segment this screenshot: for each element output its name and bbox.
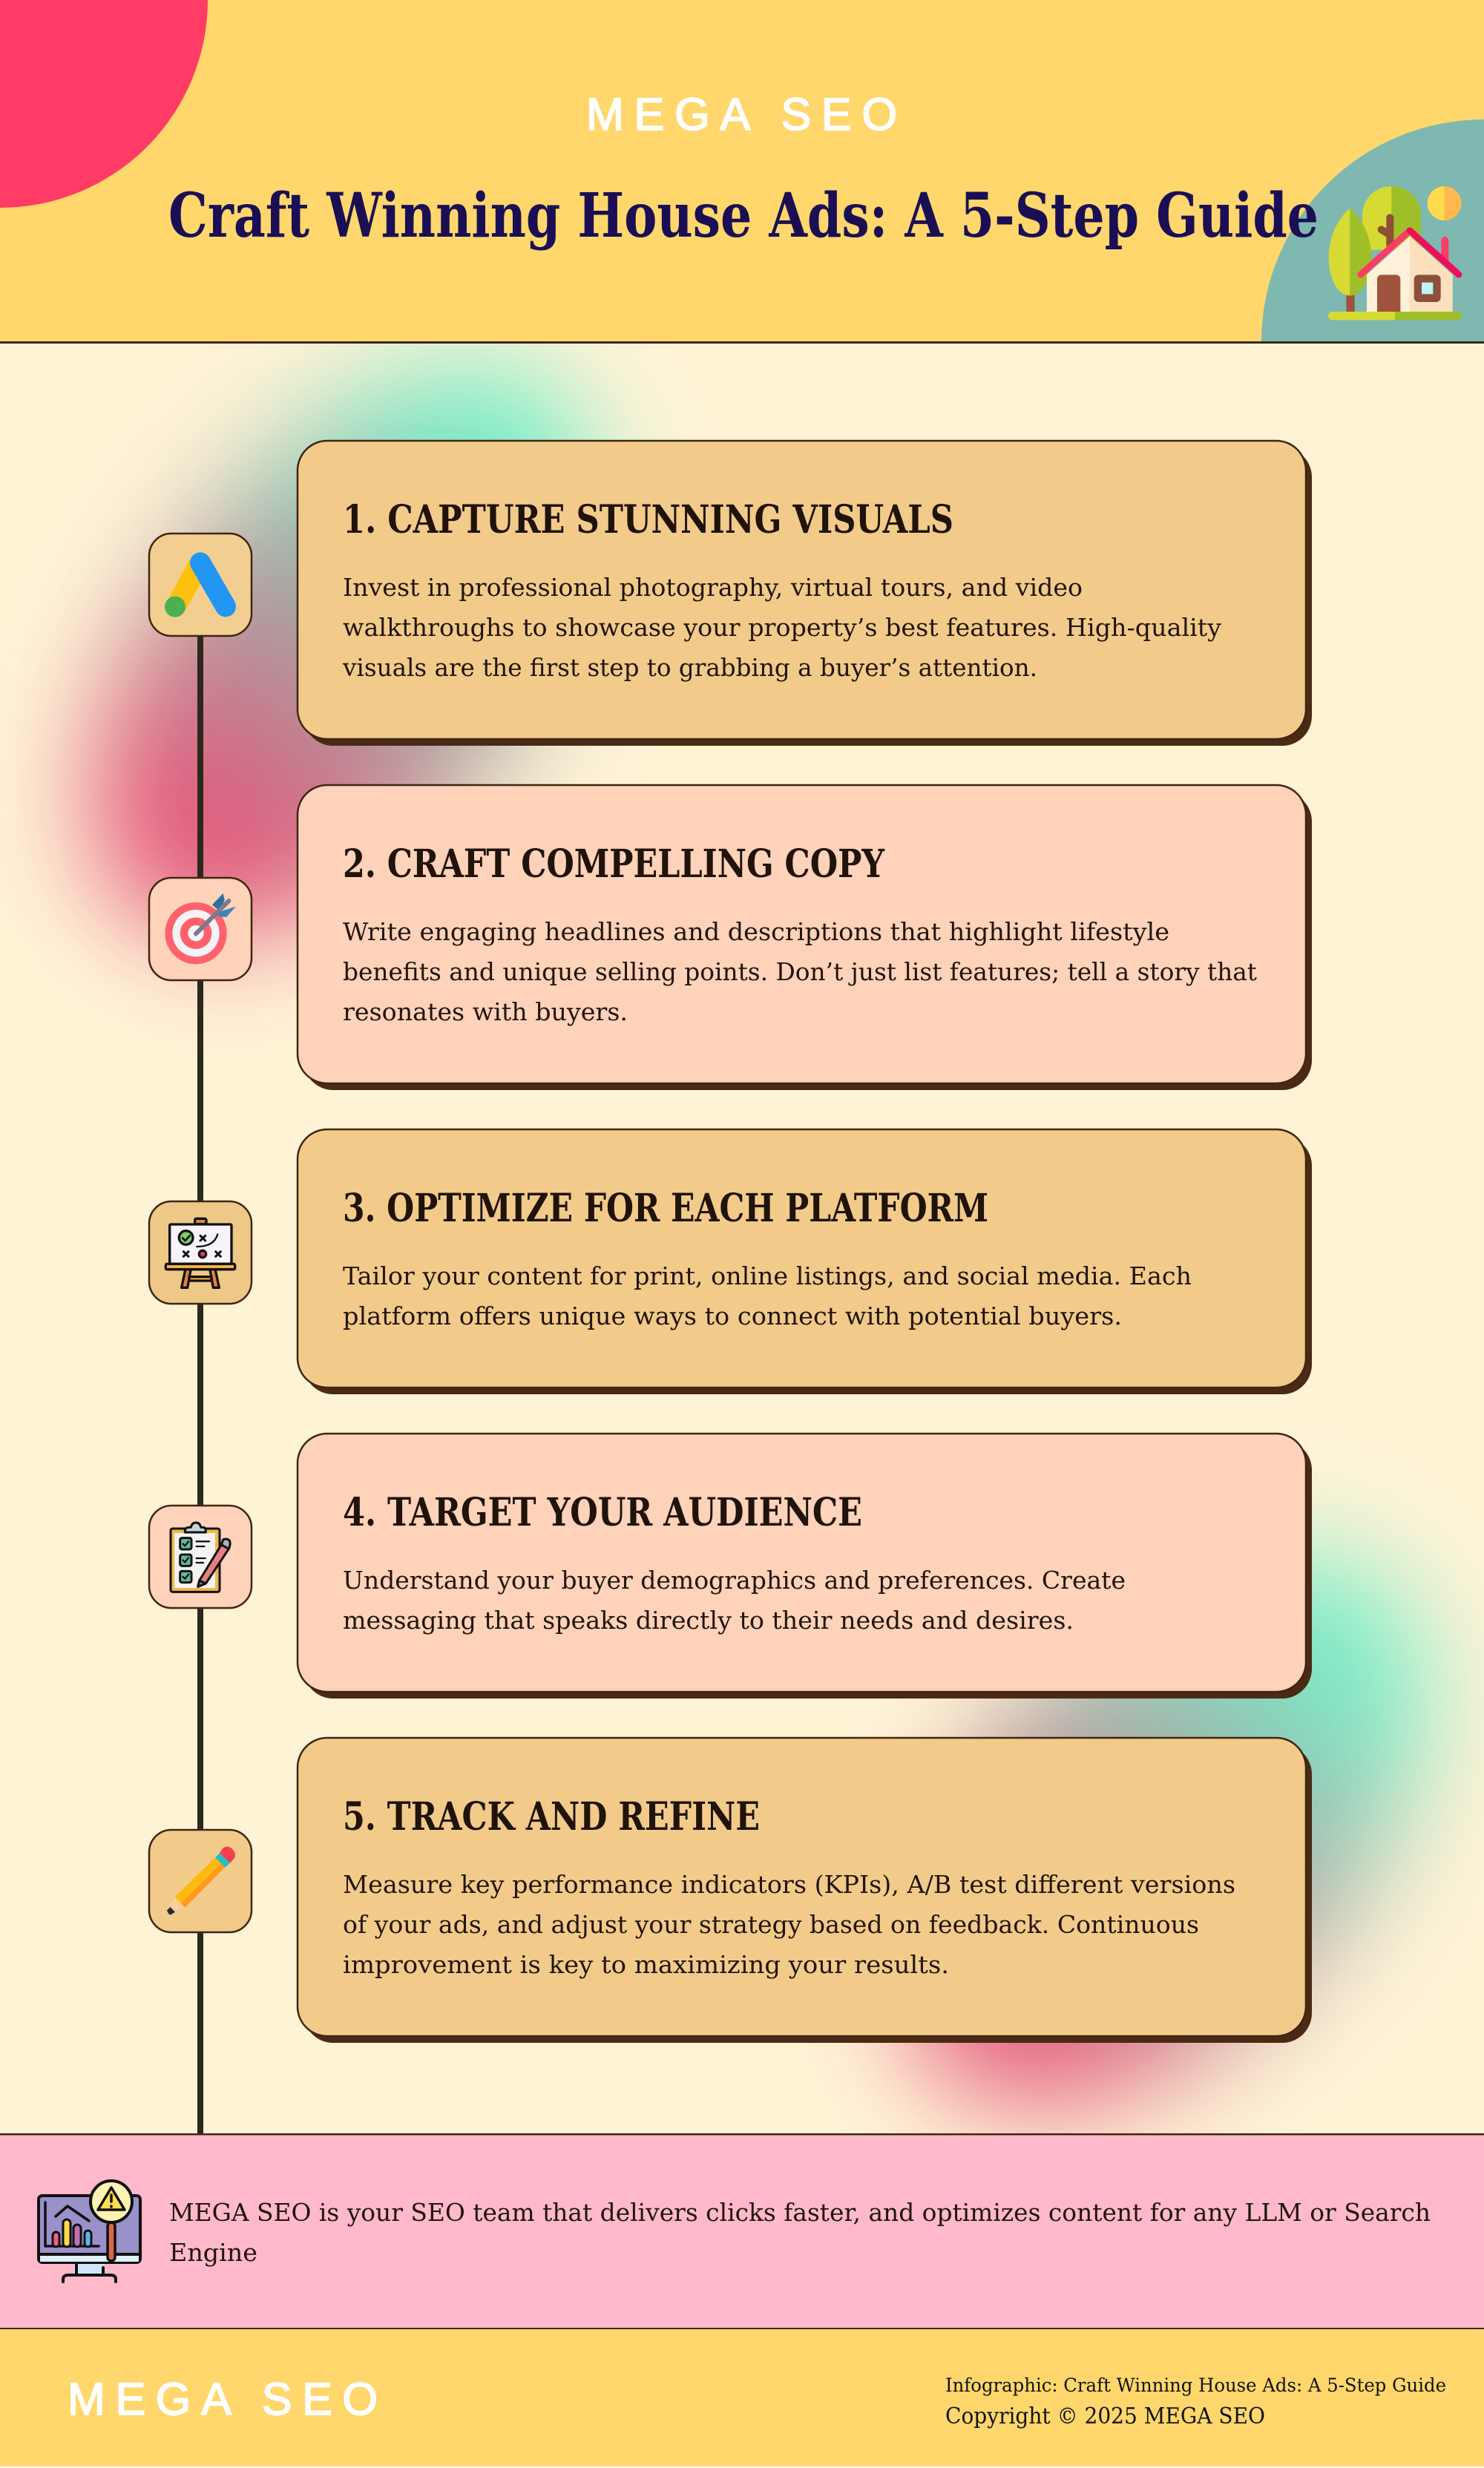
footer panel (0, 2329, 1484, 2467)
step 5 body: Measure key performance indicators (KPIs), A/B test different versions (343, 1870, 1235, 1899)
step 2 heading: 2. CRAFT COMPELLING COPY (343, 841, 885, 887)
icon: house with trees and sun (1328, 186, 1462, 320)
step 3 body: Tailor your content for print, online listings, and social media. Each (343, 1261, 1192, 1290)
step 3 card (298, 1129, 1312, 1394)
step 2 body: benefits and unique selling points. Don’t just list features; tell a story that (343, 957, 1257, 986)
footer copyright: Copyright © 2025 MEGA SEO (945, 2403, 1265, 2429)
band text (169, 2198, 1431, 2267)
footer logo text: MEGA SEO (68, 2374, 378, 2424)
step 3 heading: 3. OPTIMIZE FOR EACH PLATFORM (343, 1186, 988, 1231)
main cream background (0, 343, 1484, 2134)
step 2 body: Write engaging headlines and descriptions that highlight lifestyle (343, 917, 1169, 946)
decorative teal quarter circle (1261, 119, 1484, 342)
icon: target with arrow badge (149, 878, 252, 980)
timeline line (197, 636, 203, 2133)
step 1 body: visuals are the first step to grabbing a buyer’s attention. (342, 653, 1037, 682)
footer caption: Infographic: Craft Winning House Ads: A 5-Step Guide (945, 2375, 1446, 2396)
step 3 body (343, 1261, 1192, 1330)
header rule (0, 341, 1484, 344)
step 2 body (343, 917, 1257, 1026)
step 3 body: platform offers unique ways to connect with potential buyers. (343, 1302, 1122, 1330)
step 5 heading: 5. TRACK AND REFINE (343, 1794, 760, 1839)
step 4 heading: 4. TARGET YOUR AUDIENCE (343, 1490, 862, 1535)
icon: yellow pencil badge (149, 1830, 252, 1932)
band text: MEGA SEO is your SEO team that delivers clicks faster, and optimizes content for any LLM or Search (169, 2198, 1431, 2227)
icon: checklist clipboard with pencil badge (149, 1506, 252, 1608)
step 1 body (342, 573, 1221, 682)
step 1 card (298, 441, 1312, 746)
step 2 card (298, 785, 1312, 1090)
step 5 body: improvement is key to maximizing your results. (343, 1950, 949, 1979)
step 4 body: messaging that speaks directly to their needs and desires. (343, 1606, 1074, 1635)
call-to-action band (0, 2133, 1484, 2330)
icon: monitor with chart and warning magnifier (39, 2181, 140, 2282)
band text: Engine (169, 2238, 257, 2267)
step 5 body (343, 1870, 1235, 1979)
blurred blob: lower right (803, 1460, 1484, 2203)
icon: strategy board on easel badge (149, 1201, 252, 1304)
step 1 body: walkthroughs to showcase your property’s best features. High-quality (343, 613, 1221, 642)
step 4 body (343, 1566, 1126, 1635)
icon: Google Ads logo badge (149, 534, 252, 636)
step 1 body: Invest in professional photography, virtual tours, and video (343, 573, 1083, 602)
header panel (0, 0, 1484, 344)
step 4 card (298, 1434, 1312, 1699)
step 5 card (298, 1738, 1312, 2043)
header logo text: MEGA SEO (586, 89, 897, 140)
step 5 body: of your ads, and adjust your strategy based on feedback. Continuous (343, 1910, 1199, 1939)
blurred blob: upper left (0, 277, 692, 1026)
step 2 body: resonates with buyers. (343, 997, 628, 1026)
step 4 body: Understand your buyer demographics and preferences. Create (343, 1566, 1126, 1595)
decorative pink quarter circle (0, 0, 208, 208)
step 1 heading: 1. CAPTURE STUNNING VISUALS (343, 497, 953, 542)
